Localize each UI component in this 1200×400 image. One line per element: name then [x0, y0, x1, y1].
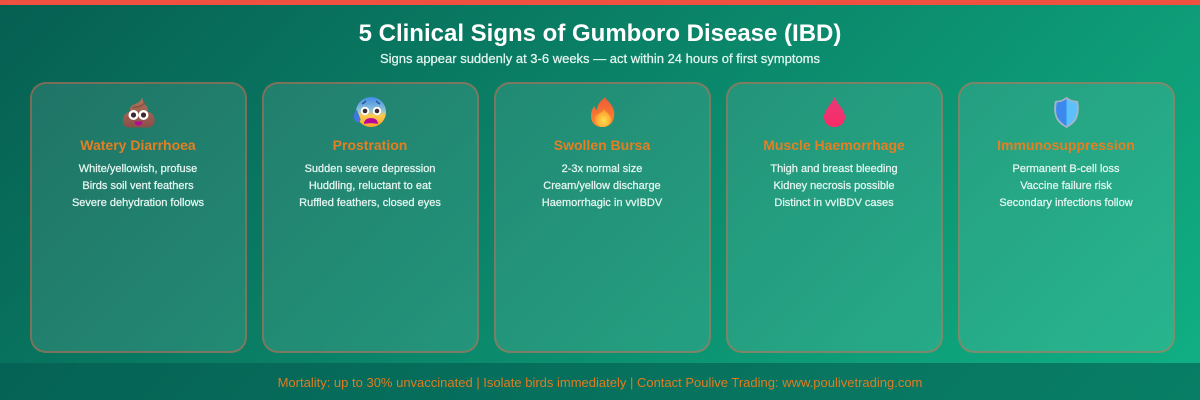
title: 5 Clinical Signs of Gumboro Disease (IBD) [359, 20, 841, 47]
subtitle: Signs appear suddenly at 3-6 weeks — act within 24 hours of first symptoms [380, 51, 820, 66]
heading: Immunosuppression [997, 136, 1135, 152]
heading: Swollen Bursa [554, 136, 650, 152]
heading: Watery Diarrhoea [80, 136, 196, 152]
panel: swollen bursa [494, 82, 710, 352]
text block: 2-3x normal size [562, 162, 642, 174]
text block: Secondary infections follow [999, 196, 1133, 208]
text block: Permanent B-cell loss [1012, 162, 1120, 174]
text block [770, 162, 898, 208]
icon: fire [591, 97, 614, 127]
text block: Thigh and breast bleeding [770, 162, 898, 174]
text block [999, 162, 1133, 209]
text block: Haemorrhagic in vvIBDV [542, 196, 662, 208]
icon: pile of poo [122, 98, 155, 128]
text block: Sudden severe depression [305, 162, 435, 174]
heading: Prostration [333, 136, 407, 152]
icon: fearful face [354, 97, 386, 127]
text block: Distinct in vvIBDV cases [774, 196, 894, 208]
text block: White/yellowish, profuse [79, 162, 197, 174]
text block: Birds soil vent feathers [82, 180, 194, 192]
icon: drop of blood [824, 97, 845, 127]
panel: immunosuppression [958, 82, 1174, 352]
panel: muscle haemorrhage [726, 82, 942, 352]
text block [299, 162, 441, 209]
icon: shield [1054, 97, 1079, 128]
footer text: Mortality: up to 30% unvaccinated | Isolate birds immediately | Contact Poulive Trading: www.poulivetrading.com [278, 375, 922, 390]
text block: Severe dehydration follows [72, 196, 204, 208]
footer band [0, 363, 1200, 400]
text block: Huddling, reluctant to eat [309, 180, 431, 192]
text block: Ruffled feathers, closed eyes [299, 196, 441, 208]
text block [542, 162, 662, 209]
text block: Vaccine failure risk [1020, 180, 1112, 192]
panel: watery diarrhoea [30, 82, 246, 352]
heading: Muscle Haemorrhage [763, 136, 905, 152]
text block: Kidney necrosis possible [773, 180, 895, 192]
panel: prostration [262, 82, 478, 352]
text block: Cream/yellow discharge [543, 180, 661, 192]
text block [72, 162, 204, 209]
top accent bar [0, 0, 1200, 5]
